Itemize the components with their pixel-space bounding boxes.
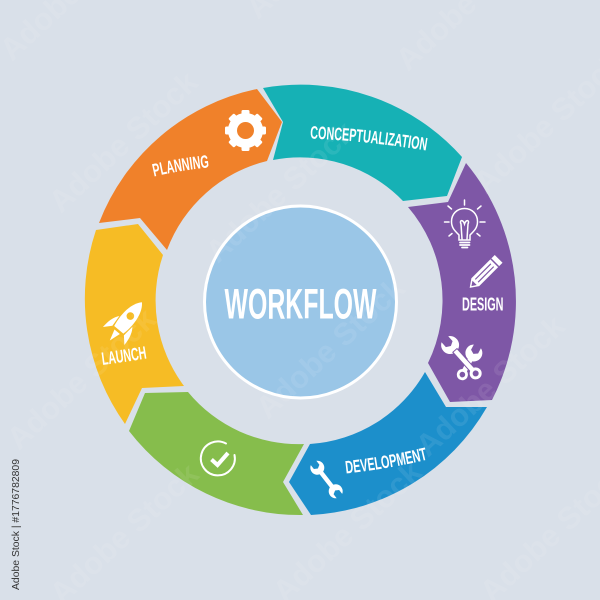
label: design: DESIGN bbox=[462, 294, 504, 314]
panel: design segment bbox=[408, 163, 516, 402]
watermark: Adobe Stock pattern: Adobe Stock bbox=[249, 270, 412, 425]
panel: planning segment bbox=[99, 89, 282, 250]
panel: green check segment bbox=[129, 392, 304, 515]
panel: conceptualization segment bbox=[263, 84, 462, 201]
icon: light bulb bbox=[444, 200, 485, 248]
panel: development segment bbox=[289, 372, 487, 515]
label: development: DEVELOPMENT bbox=[345, 448, 426, 474]
icon: rocket bbox=[99, 293, 153, 350]
center circle bbox=[204, 206, 396, 398]
icon: crossed wrenches bbox=[438, 333, 485, 383]
icon: check circle bbox=[201, 441, 235, 475]
icon: wrench bbox=[308, 459, 345, 500]
icon: gear bbox=[225, 110, 266, 151]
title: workflow: WORKFLOW bbox=[224, 280, 377, 328]
label: planning: PLANNING bbox=[152, 155, 208, 176]
credit: stock id: Adobe Stock | #1776782809 bbox=[10, 459, 22, 590]
watermark: Adobe Stock pattern: Adobe Stock bbox=[409, 308, 572, 463]
icon: pencil bbox=[466, 255, 503, 292]
watermark: Adobe Stock pattern: Adobe Stock bbox=[199, 114, 362, 269]
label: conceptualization: CONCEPTUALIZATION bbox=[310, 126, 428, 150]
watermark: Adobe Stock pattern: Adobe Stock bbox=[42, 64, 205, 219]
panel: launch segment bbox=[84, 224, 184, 424]
label: launch: LAUNCH bbox=[102, 346, 146, 365]
watermark: Adobe Stock pattern: Adobe Stock bbox=[0, 301, 163, 456]
